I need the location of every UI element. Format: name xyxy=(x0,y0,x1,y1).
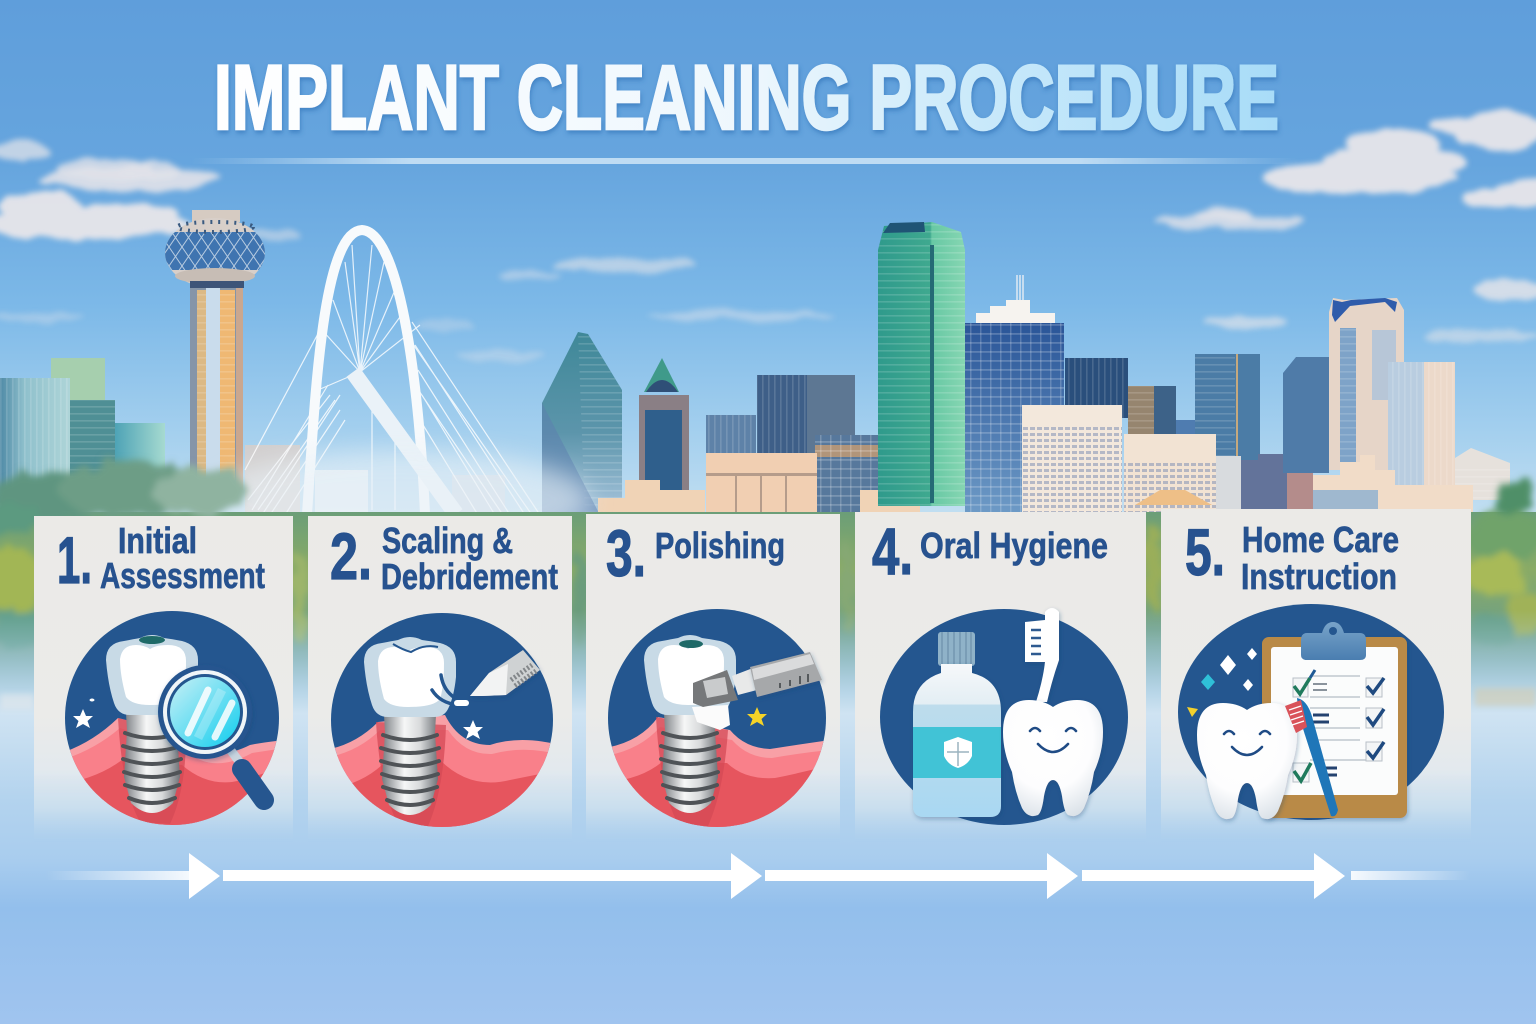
right-hand beige tower group xyxy=(1283,298,1510,512)
Margaret Hunt Hill Bridge xyxy=(245,230,540,515)
heading: Scaling and Debridement: Scaling & xyxy=(382,520,513,561)
icon: toothbrush xyxy=(1025,608,1059,702)
icon: mouthwash, toothbrush and smiling tooth xyxy=(880,608,1128,825)
icon: sparkles xyxy=(1187,648,1257,717)
icon: red and blue toothbrush xyxy=(1285,698,1338,816)
Fountain Place tower xyxy=(542,332,622,515)
icon: checklist, toothbrush and smiling tooth xyxy=(1178,604,1444,820)
step number 3: 3. xyxy=(606,516,646,590)
teal-capped tower xyxy=(639,358,689,495)
heading: Home Care Instruction: Home Care xyxy=(1242,519,1399,560)
panel 3: Polishing xyxy=(586,514,840,842)
trees and riverbank greenery xyxy=(0,460,1536,702)
process arrows xyxy=(45,853,1471,899)
Reunion Tower xyxy=(160,210,270,490)
step number 4: 4. xyxy=(872,514,913,588)
heading: Polishing: Polishing xyxy=(655,525,785,566)
step number 1: 1. xyxy=(57,523,92,597)
heading: Initial Assessment: Assessment xyxy=(100,555,265,596)
arrow 4 xyxy=(1082,853,1345,899)
panel 5: Home Care Instruction xyxy=(1161,509,1471,842)
title underline xyxy=(190,158,1300,164)
heading: Home Care Instruction: Instruction xyxy=(1241,556,1397,597)
icon: mouthwash bottle xyxy=(913,632,1001,817)
fog and lower sky band xyxy=(0,610,1536,1024)
arrow 2 xyxy=(223,853,762,899)
haze over the bridge area xyxy=(210,450,590,550)
step number 5: 5. xyxy=(1185,515,1225,589)
pale shoreline haze xyxy=(0,688,1536,710)
arrow 3 xyxy=(765,853,1078,899)
arrow 1 xyxy=(45,853,220,899)
clouds xyxy=(0,112,1536,361)
right-hand blue and dark towers xyxy=(965,275,1313,515)
heading: Initial Assessment: Initial xyxy=(118,520,197,561)
icon: implant being scaled xyxy=(331,613,553,827)
heading: Scaling and Debridement: Debridement xyxy=(381,556,558,597)
skyline: left buildings xyxy=(0,358,165,503)
icon: clipboard checklist xyxy=(1262,622,1407,818)
panel 4: Oral Hygiene xyxy=(855,512,1146,842)
icon: implant being polished xyxy=(605,609,830,840)
panel 2: Scaling and Debridement xyxy=(308,516,572,842)
trailing connector xyxy=(1351,871,1471,880)
heading: Oral Hygiene: Oral Hygiene xyxy=(920,525,1108,566)
step number 2: 2. xyxy=(330,519,372,593)
Comerica green tower xyxy=(878,222,965,506)
panel 1: Initial Assessment xyxy=(34,516,293,842)
low peach and central buildings xyxy=(598,375,920,515)
icon: implant under magnifying glass xyxy=(65,611,279,825)
